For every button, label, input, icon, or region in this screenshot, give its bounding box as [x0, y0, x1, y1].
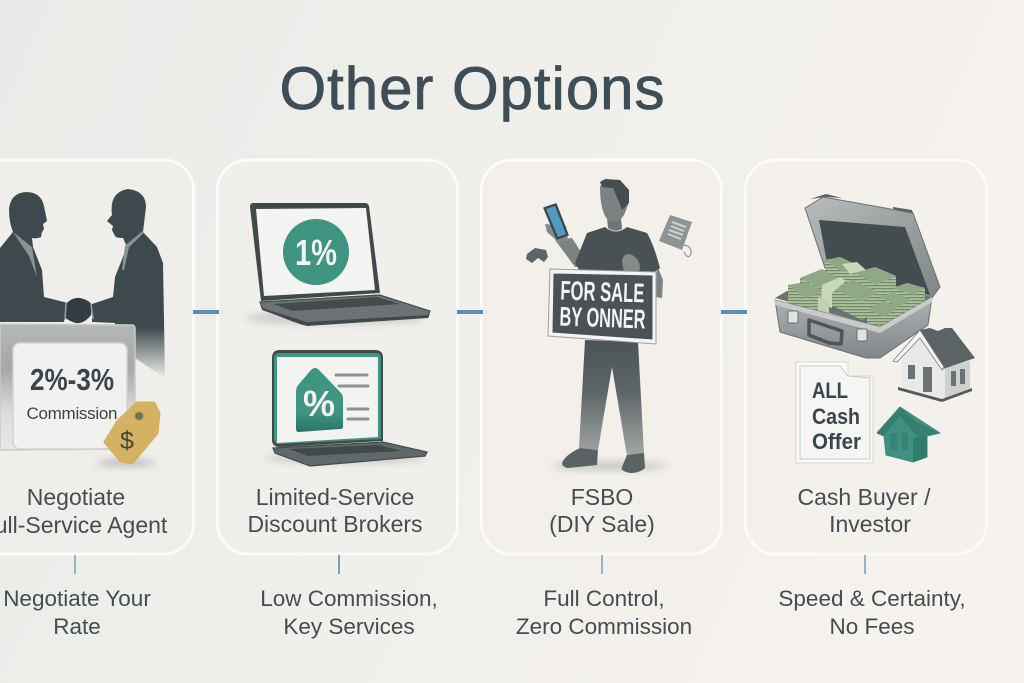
panel: FSBO — [482, 160, 722, 554]
caption: speed and certainty, no fees: No Fees — [829, 614, 915, 639]
icon: phone — [544, 204, 568, 239]
label: FSBO: (DIY Sale) — [549, 511, 655, 537]
stem: card 4 caption — [864, 555, 866, 574]
label: cash buyer / investor: Cash Buyer / — [798, 484, 931, 510]
icon: all cash offer document: Cash — [812, 404, 860, 429]
stem: card 2 caption — [338, 555, 340, 574]
panel: negotiate full-service agent — [0, 160, 194, 554]
caption: speed and certainty, no fees: Speed & Certainty, — [778, 586, 966, 611]
icon: all cash offer document: Offer — [812, 429, 861, 454]
icon: all cash offer document: ALL — [812, 378, 848, 403]
shirt — [575, 227, 660, 275]
commission badge — [0, 324, 135, 450]
icon: person holding for sale sign: BY ONNER — [559, 302, 646, 334]
legs — [579, 340, 644, 456]
icon: laptop with percent tag — [265, 350, 427, 466]
sign — [548, 269, 656, 344]
arms — [555, 238, 663, 298]
icon: keys — [526, 248, 548, 263]
label: limited-service discount brokers: Limited-Service — [256, 484, 414, 510]
commission badge: 2%-3% — [30, 362, 114, 397]
icon: laptop with 1%: 1% — [295, 232, 337, 273]
case body — [775, 297, 932, 358]
icon: price tag: $ — [120, 427, 134, 455]
stem: card 1 caption — [74, 555, 76, 574]
icon: price tag — [96, 403, 159, 466]
latches — [788, 311, 798, 323]
caption: negotiate your rate: Rate — [53, 614, 101, 639]
title: Other Options — [280, 55, 664, 122]
icon: briefcase of cash — [775, 194, 940, 358]
icon: grey house — [893, 328, 975, 402]
icon: all cash offer document — [796, 362, 873, 463]
icon: document — [659, 215, 692, 257]
icon: green house — [877, 407, 940, 462]
label: cash buyer / investor: Investor — [829, 511, 911, 537]
caption: low commission, key services: Key Services — [283, 614, 415, 639]
caption: full control, zero commission: Zero Commission — [516, 614, 692, 639]
lid — [805, 197, 940, 298]
connector: card 2 to card 3 — [457, 310, 483, 314]
caption: low commission, key services: Low Commission, — [260, 586, 438, 611]
connector: card 3 to card 4 — [721, 310, 747, 314]
icon: laptop with 1% — [245, 203, 430, 326]
connector: card 1 to card 2 — [193, 310, 219, 314]
hand — [622, 254, 640, 272]
icon: person holding for sale sign: FOR SALE — [560, 276, 645, 308]
case interior — [775, 291, 932, 327]
stem: card 3 caption — [601, 555, 603, 574]
handle — [809, 320, 842, 344]
shoes — [562, 448, 645, 473]
caption: full control, zero commission: Full Control, — [543, 586, 665, 611]
caption: negotiate your rate: Negotiate Your — [3, 586, 151, 611]
commission badge: Commission — [26, 404, 118, 423]
label: FSBO: FSBO — [571, 484, 633, 510]
label: limited-service discount brokers: Discount Brokers — [247, 511, 423, 537]
panel: cash buyer — [746, 160, 986, 554]
panel: limited-service discount brokers — [218, 160, 458, 554]
cash stacks — [825, 257, 857, 287]
icon: laptop with percent tag: % — [303, 383, 335, 424]
icon: person holding for sale sign — [545, 179, 668, 473]
label: negotiate full-service agent: Negotiate — [27, 484, 125, 510]
neck and head — [607, 218, 622, 231]
icon: handshake silhouettes — [0, 189, 165, 378]
